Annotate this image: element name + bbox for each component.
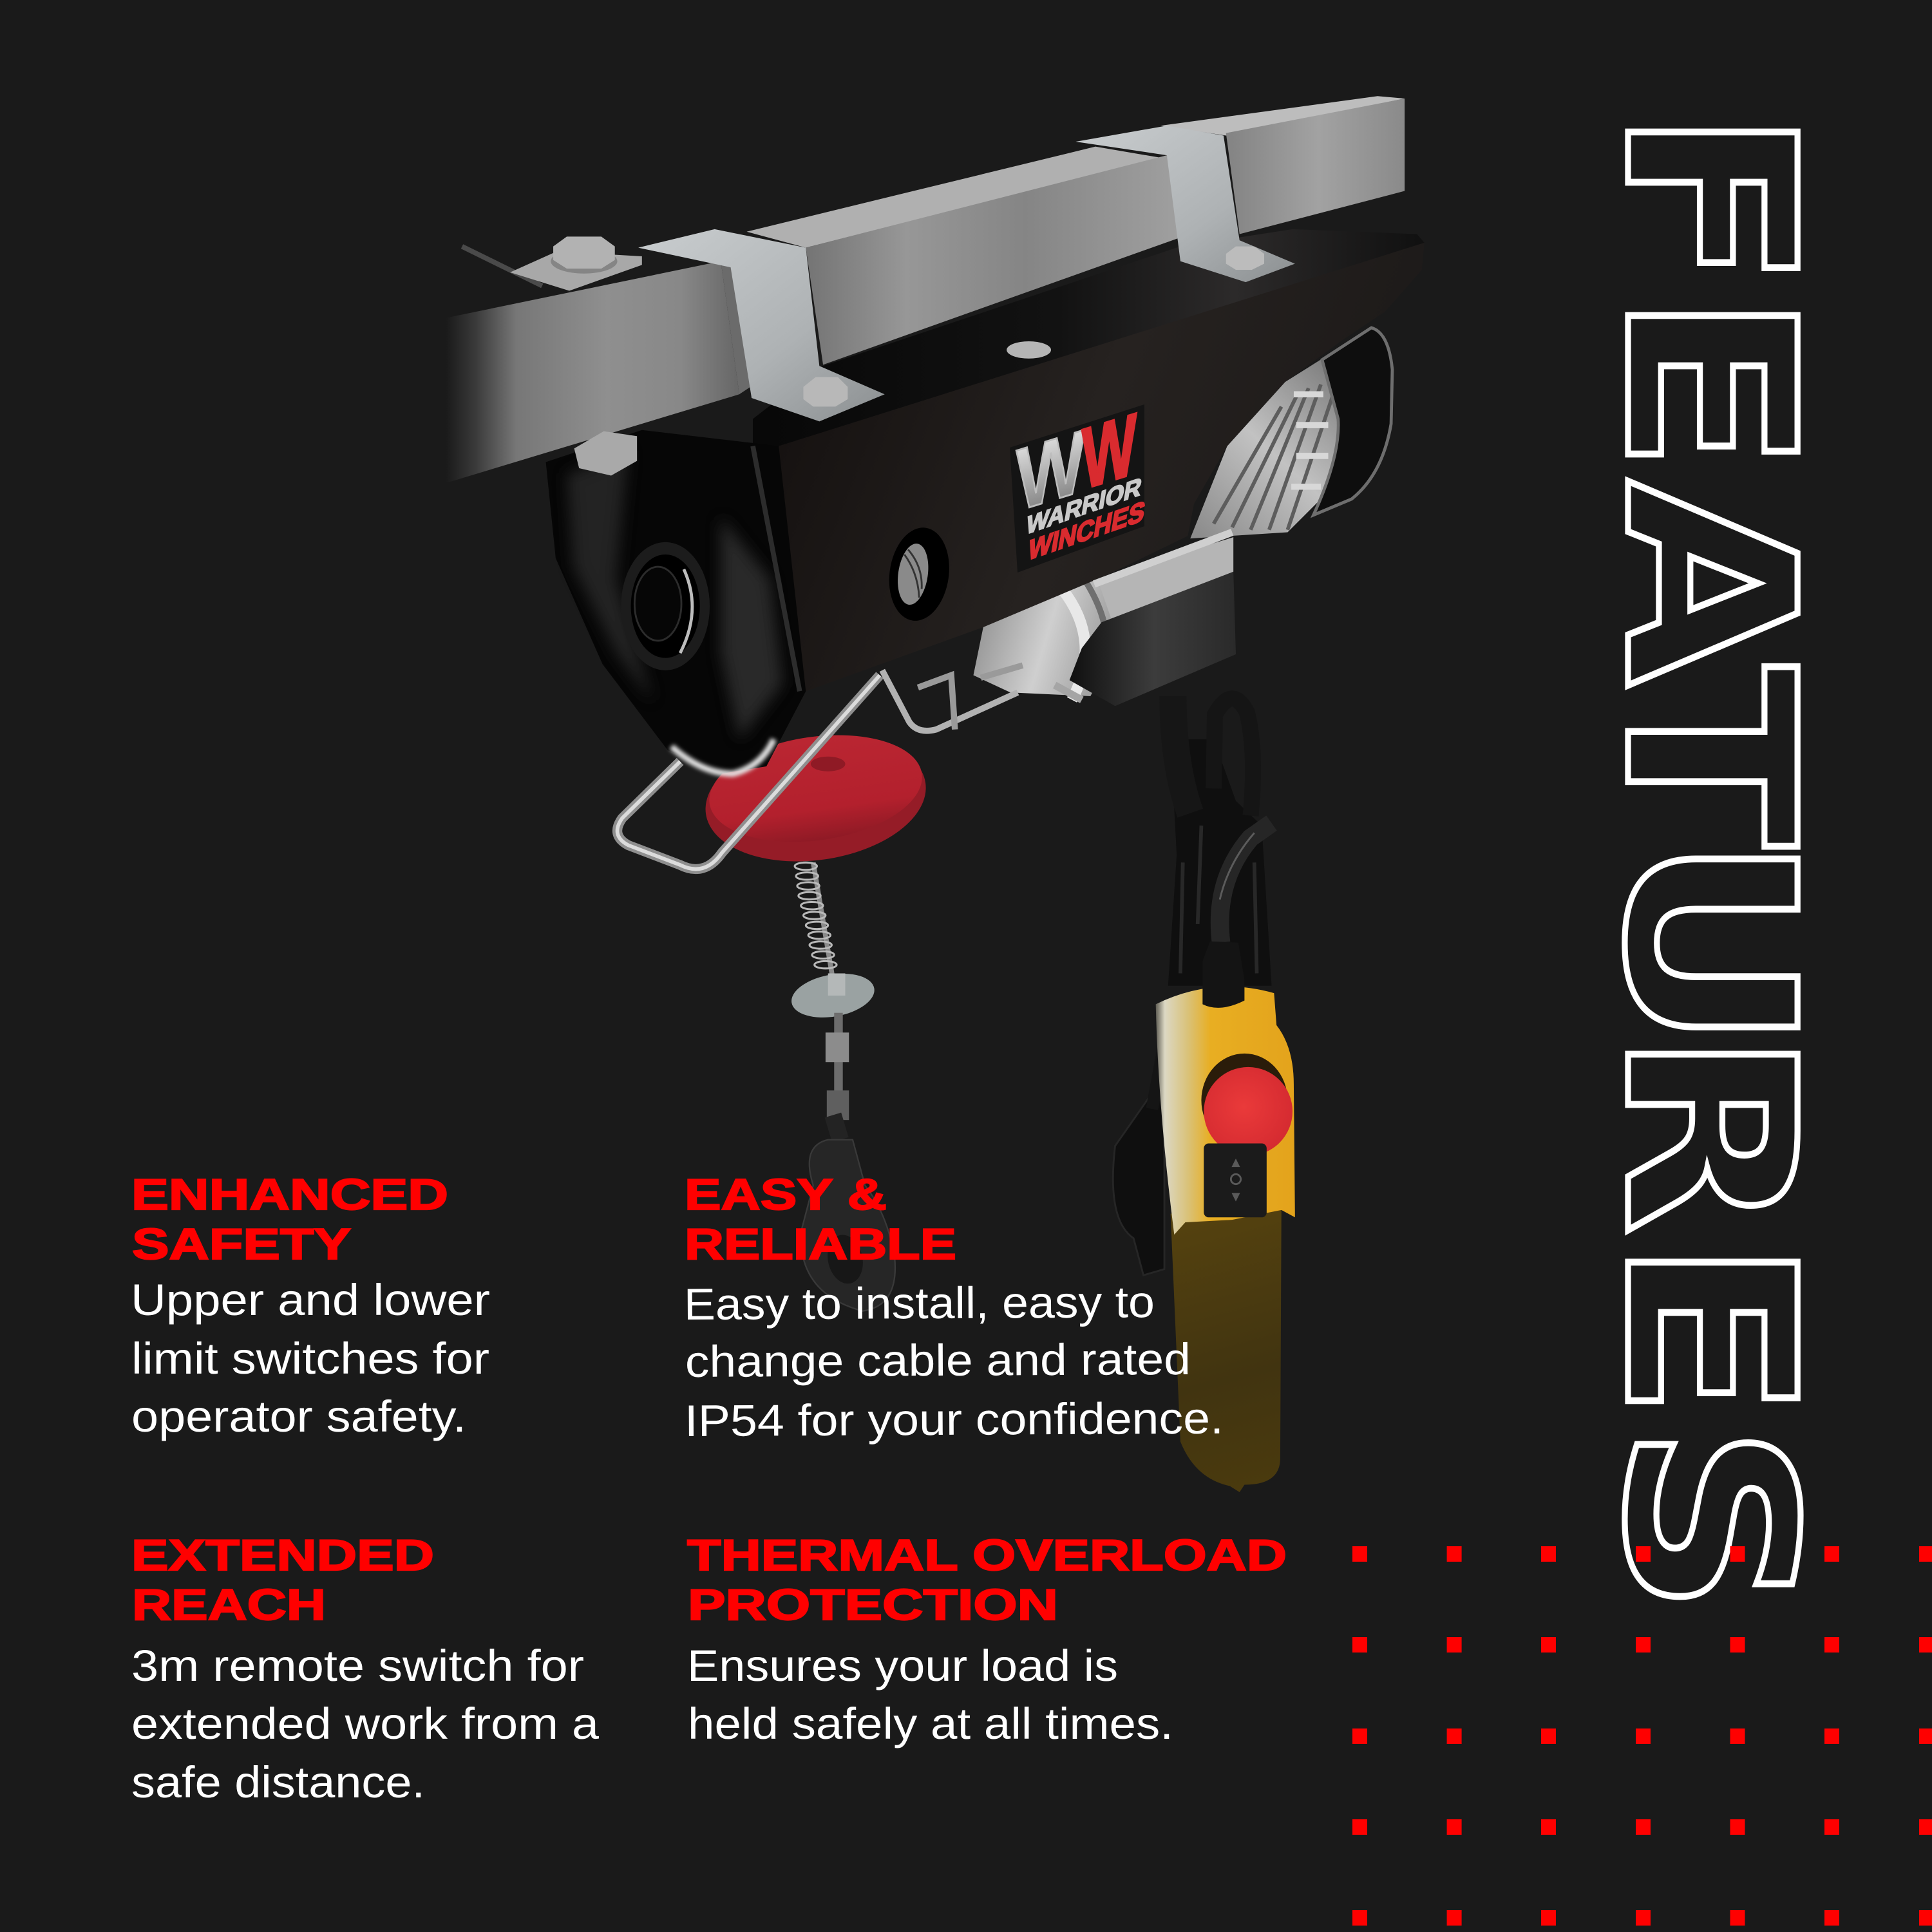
- body text: extended work from a: [131, 1699, 600, 1748]
- body text: [131, 1275, 490, 1441]
- pendant cable gland: [1202, 942, 1244, 1008]
- title: FEATURES vertical outlined: FEATURES: [1573, 108, 1844, 1616]
- up and down switch: ▼: [1231, 1191, 1240, 1204]
- body text: change cable and rated: [685, 1334, 1191, 1387]
- right beam bracket: [1075, 126, 1295, 282]
- heading: PROTECTION: [688, 1580, 1058, 1629]
- body text: [131, 1641, 600, 1807]
- top washer screw: [1007, 341, 1051, 359]
- up and down switch: [1204, 1144, 1267, 1217]
- pendant lower body: [1171, 1208, 1282, 1492]
- up and down switch: ▲: [1231, 1156, 1240, 1169]
- body text: Upper and lower: [131, 1275, 490, 1325]
- under beam nut: [574, 431, 637, 476]
- logo: Warrior Winches: [1010, 394, 1148, 573]
- side panel shine: [567, 446, 800, 774]
- heading: [687, 1531, 1287, 1629]
- feature: extended reach: [131, 1531, 600, 1807]
- lower wire lever: [618, 675, 880, 869]
- heading: [131, 1531, 434, 1629]
- bracket bolts: [803, 247, 1264, 406]
- logo wordmark bottom: WINCHES: [1026, 495, 1148, 567]
- body text: held safely at all times.: [688, 1699, 1173, 1748]
- cable sleeves: [826, 973, 849, 1140]
- body text: [687, 1641, 1173, 1748]
- gray control housing: [1095, 537, 1233, 626]
- glossy housing top: [753, 229, 1425, 446]
- heading: EXTENDED: [131, 1531, 434, 1580]
- emergency stop button: [1201, 1054, 1293, 1156]
- red limit disc: [697, 722, 934, 875]
- top plate with bolt: [510, 236, 642, 291]
- heading: [131, 1170, 448, 1269]
- motor fins: [1190, 355, 1345, 538]
- dot grid: [1352, 1546, 1932, 1926]
- black control box: [1070, 572, 1236, 706]
- logo W red: W: [1082, 394, 1137, 508]
- heading: SAFETY: [132, 1220, 351, 1269]
- body text: safe distance.: [131, 1757, 425, 1807]
- body text: limit switches for: [131, 1334, 489, 1383]
- body text: 3m remote switch for: [131, 1641, 584, 1690]
- lifting hook: [800, 1140, 895, 1311]
- power and pendant cables: [1113, 696, 1271, 1275]
- body text: Easy to install, easy to: [684, 1277, 1155, 1329]
- housing side panel: [546, 430, 806, 774]
- limit disc spring and rod: [795, 862, 837, 980]
- logo plate: [1010, 404, 1144, 573]
- product photo: electric hoist: [446, 96, 1425, 1492]
- heading: EASY &: [685, 1170, 887, 1219]
- body text: [684, 1277, 1224, 1446]
- limit switch wire: [882, 665, 1082, 731]
- feature: enhanced safety: [131, 1170, 490, 1441]
- motor end cap: [1314, 328, 1392, 515]
- heading: RELIABLE: [685, 1220, 956, 1269]
- left beam bracket: [638, 229, 885, 421]
- body text: IP54 for your confidence.: [685, 1394, 1224, 1446]
- cable drum: [973, 573, 1119, 700]
- cable port: [884, 524, 955, 625]
- logo wordmark top: WARRIOR: [1025, 471, 1144, 540]
- body text: operator safety.: [131, 1392, 466, 1441]
- heading: REACH: [132, 1580, 326, 1629]
- heading: [685, 1170, 956, 1269]
- mounting wire behind beam: [462, 247, 542, 286]
- side panel knob: [621, 542, 710, 670]
- feature: easy and reliable: [684, 1170, 1224, 1446]
- heading: ENHANCED: [131, 1170, 448, 1219]
- feature: thermal overload protection: [687, 1531, 1287, 1748]
- stop washer: [788, 968, 878, 1023]
- heading: THERMAL OVERLOAD: [687, 1531, 1287, 1580]
- logo W silver: W: [1016, 411, 1085, 531]
- body text: Ensures your load is: [687, 1641, 1118, 1690]
- black hoist housing front: [753, 243, 1425, 691]
- square steel beam: [446, 96, 1405, 483]
- silver motor rod: [1094, 533, 1232, 584]
- pendant upper body: [1156, 987, 1295, 1235]
